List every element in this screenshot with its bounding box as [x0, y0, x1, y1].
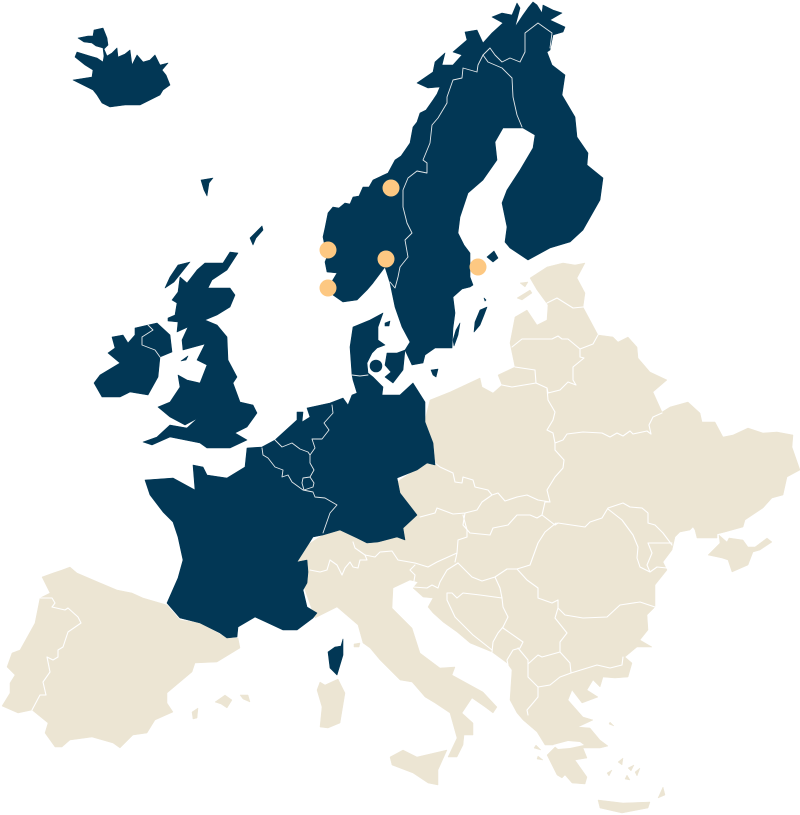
marker: Stockholm [470, 258, 486, 276]
region: highlighted countries (navy) [73, 2, 603, 675]
inlet: Gulf of Corinth [553, 741, 584, 749]
marker: Bergen [320, 242, 336, 258]
island: Sardinia [317, 679, 345, 728]
island: Ireland [94, 323, 172, 397]
landmass: central and eastern Europe, Italy, Balkans [295, 263, 800, 784]
island: Faroe [201, 178, 213, 196]
island: Corsica [328, 639, 343, 675]
marker: Trondheim [382, 180, 400, 196]
island: Iceland [73, 28, 170, 107]
island: Great Britain [143, 252, 257, 448]
island: Sicily [390, 750, 447, 785]
landmass: Norway, Sweden, Finland [323, 2, 603, 365]
location markers [320, 180, 486, 296]
islands: Aaland, Gotland, Oland, Bornholm [431, 251, 498, 377]
marker: Oslo [378, 250, 394, 268]
island: Crimea [708, 535, 772, 572]
marker: Stavanger [320, 280, 336, 296]
islands: Denmark [370, 321, 405, 383]
islands: Balearics [192, 695, 250, 719]
region: non-highlighted countries (beige) [2, 263, 800, 813]
landmass: France, Benelux, Germany, Jutland [145, 313, 435, 638]
country borders: navy region [142, 23, 552, 533]
landmass: Iberian peninsula [2, 567, 240, 748]
country borders: beige region [32, 298, 672, 715]
island: Crete [598, 800, 650, 813]
islands: Aegean, Rhodes, Estonian islands, Elba [354, 282, 665, 798]
islands: Hebrides, Man, Wight [165, 226, 263, 361]
